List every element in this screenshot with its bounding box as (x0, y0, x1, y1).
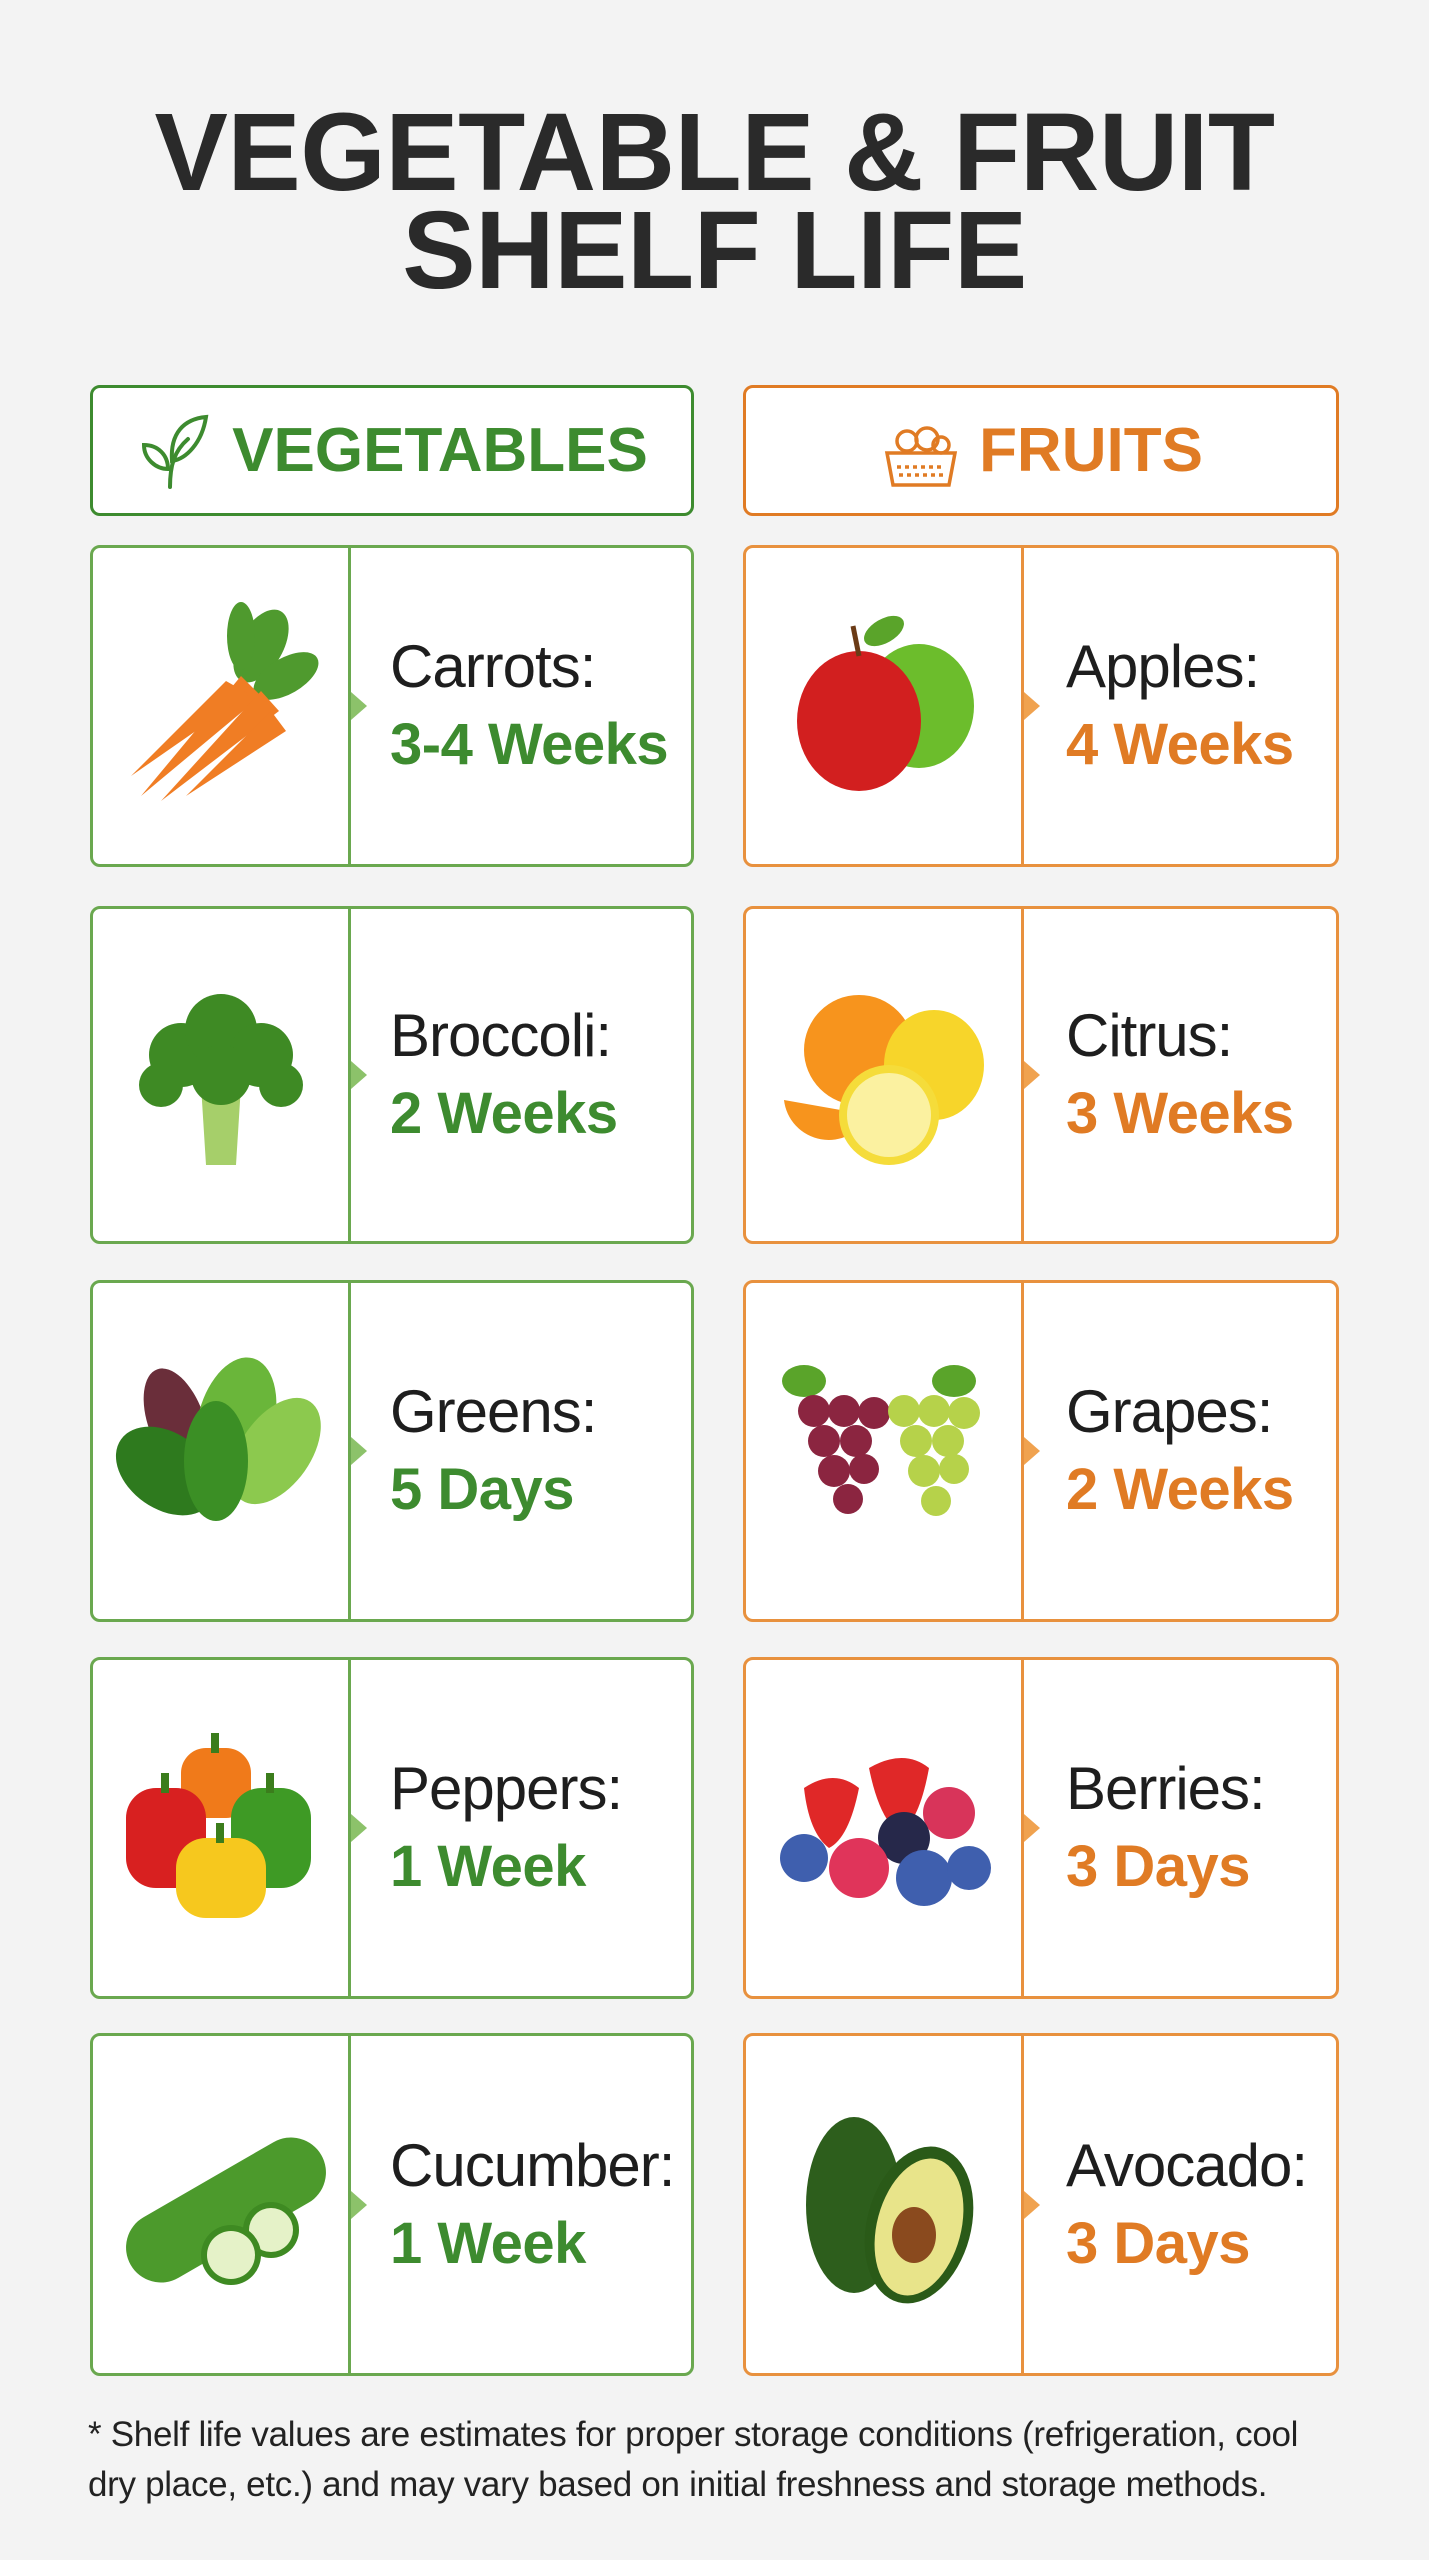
text: greens: Greens: (390, 1378, 596, 1445)
text: avocado: Avocado: (1066, 2132, 1307, 2198)
title (154, 91, 1275, 312)
text: grapes (1066, 1378, 1294, 1522)
text: citrus: Citrus: (1066, 1002, 1232, 1069)
text: citrus (1066, 1002, 1294, 1146)
text: broccoli: 2 Weeks (390, 1081, 618, 1146)
header: vegetables: VEGETABLES (232, 416, 648, 485)
card: broccoli (90, 906, 694, 1244)
icon: fruit basket (884, 426, 958, 487)
header: vegetables (90, 385, 694, 516)
text: apples: 4 Weeks (1066, 712, 1294, 777)
text: avocado (1066, 2132, 1307, 2276)
card: berries (743, 1657, 1339, 1999)
footnote: * Shelf life values are estimates for proper storage conditions (refrigeration, cool dry place, etc.) and may vary based on initial freshness and storage methods. (88, 2415, 1298, 2504)
text: cucumber: 1 Week (390, 2210, 586, 2276)
text: greens (390, 1378, 596, 1522)
text: carrots (390, 633, 668, 777)
title: VEGETABLE & FRUIT (154, 91, 1275, 214)
header: fruits (743, 385, 1339, 516)
icon: broccoli (139, 994, 303, 1165)
card: cucumber (90, 2033, 694, 2376)
text: berries: Berries: (1066, 1755, 1265, 1822)
text: carrots: Carrots: (390, 633, 595, 700)
text: avocado: 3 Days (1066, 2210, 1250, 2276)
text: cucumber (390, 2132, 674, 2276)
icon: cucumber (126, 2138, 326, 2285)
card: greens (90, 1280, 694, 1622)
text: peppers: 1 Week (390, 1834, 586, 1899)
text: peppers (390, 1755, 622, 1899)
card: citrus (743, 906, 1339, 1244)
text: grapes: 2 Weeks (1066, 1457, 1294, 1522)
card: peppers (90, 1657, 694, 1999)
card: apples (743, 545, 1339, 867)
icon: leaf sprout (142, 414, 208, 489)
text: carrots: 3-4 Weeks (390, 712, 668, 777)
icon: avocado (806, 2117, 974, 2304)
icon: carrots (131, 602, 318, 801)
text: broccoli: Broccoli: (390, 1002, 611, 1069)
text: peppers: Peppers: (390, 1755, 622, 1822)
text: apples: Apples: (1066, 633, 1259, 700)
icon: peppers (126, 1733, 311, 1918)
icon: grapes (782, 1365, 980, 1516)
text: berries: 3 Days (1066, 1834, 1250, 1899)
header: fruits: FRUITS (979, 416, 1203, 485)
text: greens: 5 Days (390, 1457, 574, 1522)
text: broccoli (390, 1002, 618, 1146)
icon: berries (780, 1758, 991, 1906)
text: berries (1066, 1755, 1265, 1899)
card: grapes (743, 1280, 1339, 1622)
title: SHELF LIFE (402, 189, 1027, 312)
text: grapes: Grapes: (1066, 1378, 1272, 1445)
card: carrots (90, 545, 694, 867)
icon: greens (116, 1358, 321, 1521)
card: avocado (743, 2033, 1339, 2376)
text: citrus: 3 Weeks (1066, 1081, 1294, 1146)
icon: citrus (784, 995, 984, 1165)
text: apples (1066, 633, 1294, 777)
icon: apples (797, 616, 974, 791)
text: cucumber: Cucumber: (390, 2132, 674, 2198)
